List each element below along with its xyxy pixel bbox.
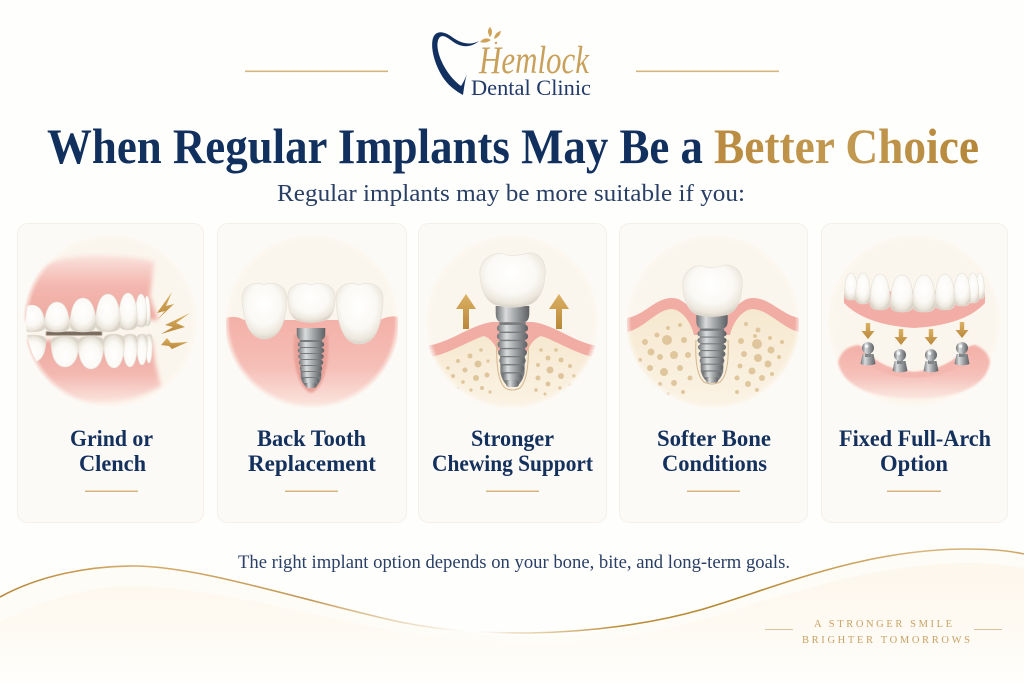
- label: Fixed Full-Arch Option: [839, 426, 991, 476]
- title: Better Choice: [714, 118, 979, 174]
- panel: stronger chewing support: [418, 224, 606, 522]
- icon: clenched teeth: [19, 255, 161, 403]
- label: Grind or Clench: Clench: [79, 451, 146, 476]
- gold wave line: [0, 549, 1024, 633]
- label: Fixed Full-Arch Option: Fixed Full-Arch: [839, 426, 991, 451]
- label: Stronger Chewing Support: Chewing Support: [432, 451, 593, 476]
- logo: Hemlock Dental Clinic: [432, 27, 591, 100]
- panel: fixed full-arch option: [822, 224, 1008, 522]
- label: Back Tooth Replacement: Back Tooth: [257, 426, 366, 451]
- label: Stronger Chewing Support: [432, 426, 593, 476]
- label: Grind or Clench: [70, 426, 153, 476]
- panel: softer bone conditions: [620, 224, 808, 522]
- tagline: [765, 619, 1002, 646]
- title: When Regular Implants May Be a: [47, 118, 703, 174]
- logo wordmark Hemlock: Hemlock: [478, 39, 590, 82]
- icon: right up arrow: [549, 294, 569, 329]
- label: Softer Bone Conditions: Conditions: [662, 451, 767, 476]
- label: Stronger Chewing Support: Stronger: [471, 426, 554, 451]
- icon: tooth outline: [432, 32, 479, 95]
- icon: left up arrow: [456, 294, 476, 329]
- label: Fixed Full-Arch Option: Option: [880, 451, 948, 476]
- label: Back Tooth Replacement: [248, 426, 376, 476]
- footer wave: [0, 549, 1024, 683]
- icon: gold down arrows: [862, 322, 968, 345]
- label: Back Tooth Replacement: Replacement: [248, 451, 376, 476]
- label: Softer Bone Conditions: [657, 426, 771, 476]
- icon: gold lightning bolts: [157, 292, 190, 349]
- label: Softer Bone Conditions: Softer Bone: [657, 426, 771, 451]
- icon: gold leaves: [480, 27, 501, 44]
- panel: grind or clench: [18, 224, 204, 522]
- logo wordmark Dental Clinic: Dental Clinic: [471, 75, 591, 100]
- icon: lower arch with posts: [838, 342, 990, 399]
- tagline: A STRONGER SMILE: [814, 619, 952, 630]
- label: Grind or Clench: Grind or: [70, 426, 153, 451]
- icon: upper full-arch denture: [844, 273, 985, 328]
- icon: implant with upward arrows: [426, 253, 598, 410]
- icon: implant in soft bone: [627, 265, 799, 410]
- header divider right: [636, 70, 779, 72]
- subtitle: Regular implants may be more suitable if you:: [277, 180, 745, 207]
- closing statement: The right implant option depends on your bone, bite, and long-term goals.: [238, 552, 790, 573]
- icon: implant between teeth: [226, 283, 398, 410]
- header divider left: [245, 70, 388, 72]
- tagline: BRIGHTER TOMORROWS: [802, 635, 970, 646]
- panel: back tooth replacement: [218, 224, 406, 522]
